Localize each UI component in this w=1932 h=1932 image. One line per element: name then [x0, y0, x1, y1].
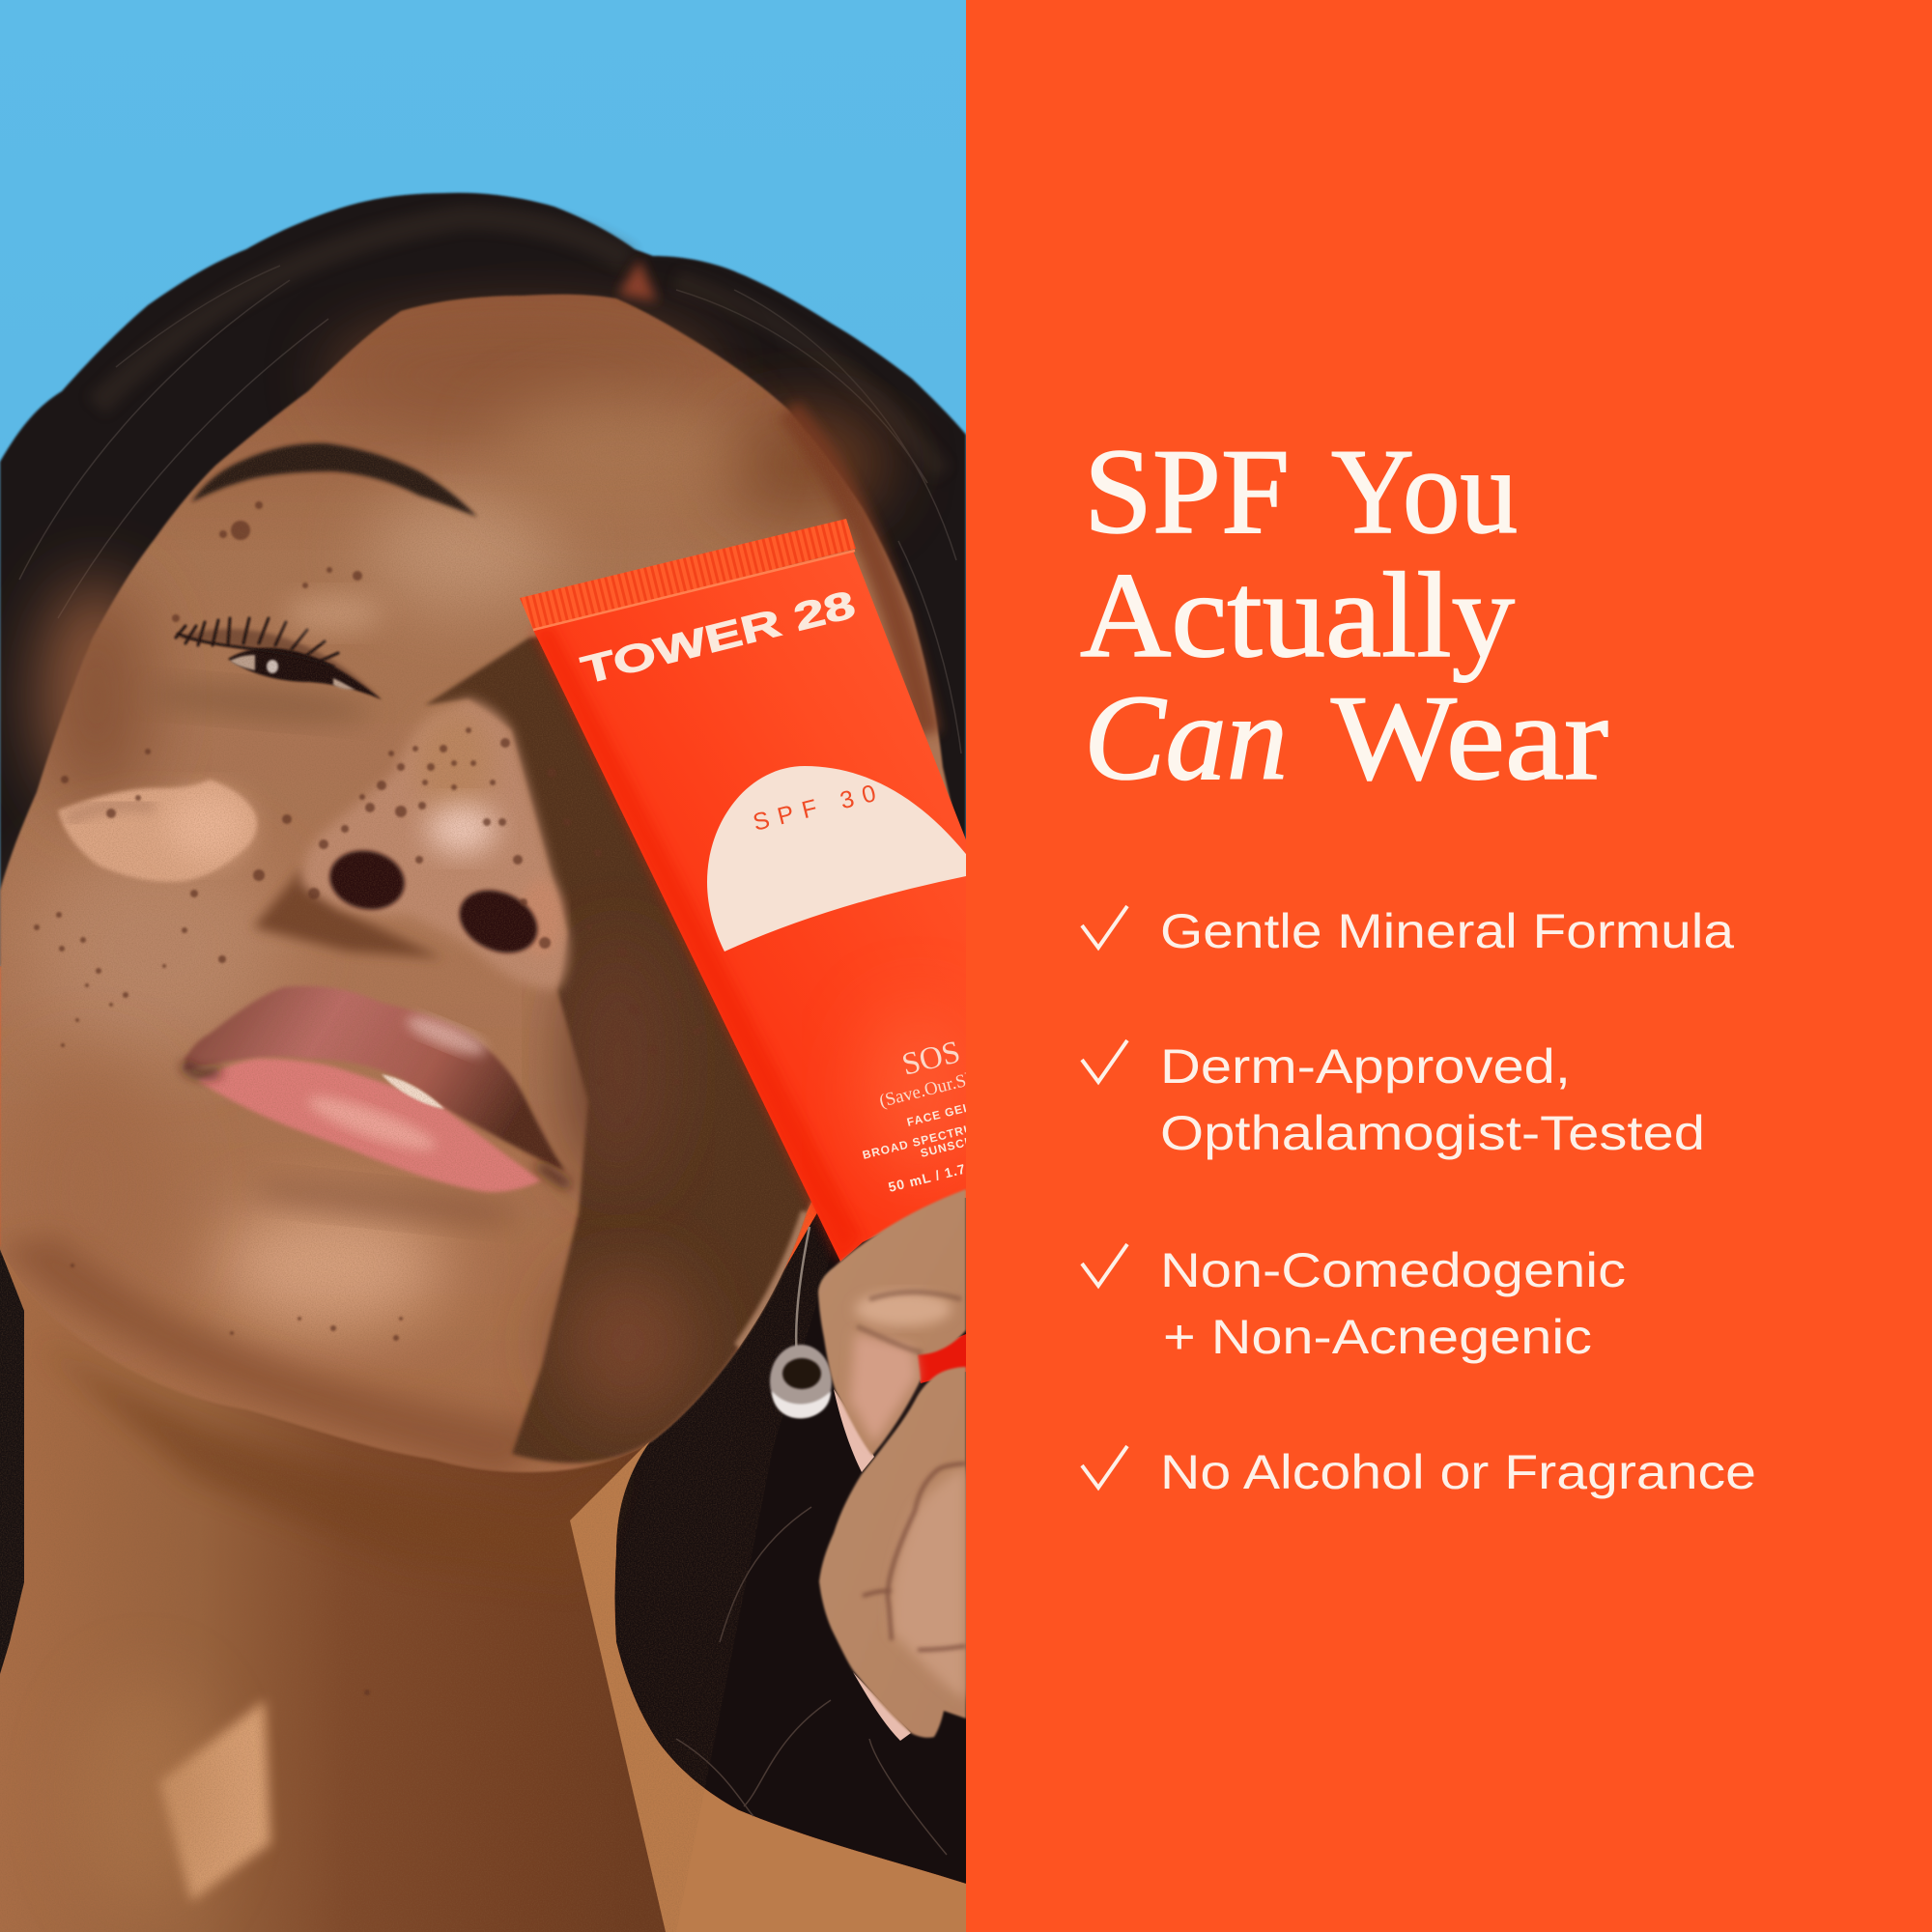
left edge shade — [533, 626, 863, 1262]
item: derm-approved — [1082, 1039, 1705, 1160]
lower fist — [819, 1367, 966, 1738]
mouth corners — [185, 1066, 566, 1184]
lower lip gloss — [303, 1088, 440, 1159]
eyelid highlight — [285, 594, 382, 633]
item: non-comedogenic — [1082, 1243, 1626, 1364]
earring — [770, 1227, 832, 1418]
upper lip — [185, 986, 565, 1171]
loose hair strands over shoulder — [676, 1507, 947, 1855]
item: gentle mineral formula: Gentle Mineral Formula — [1160, 904, 1734, 958]
temple highlight — [367, 493, 560, 609]
upper finger and palm — [818, 1189, 966, 1456]
hand holding tube — [818, 1189, 966, 1741]
lit shoulder — [570, 1437, 966, 1932]
palm pink area — [850, 1333, 918, 1444]
heading: Wear — [1331, 671, 1608, 806]
product name: SOS — [898, 1035, 964, 1083]
crimp line — [533, 551, 855, 630]
chin highlight — [213, 1203, 444, 1328]
sky background — [0, 0, 966, 966]
warm glow on face of tube — [860, 1005, 976, 1179]
brand wordmark: TOWER 28 — [578, 583, 860, 693]
nose tip highlight — [427, 804, 497, 854]
skin grain texture — [0, 290, 966, 1932]
eyebrow — [191, 443, 477, 517]
heading: Can — [1084, 671, 1288, 806]
hair: top and sides — [0, 193, 966, 966]
right nostril — [449, 879, 548, 964]
face — [0, 259, 966, 1478]
item: derm-approved: Opthalamogist-Tested — [1160, 1106, 1705, 1160]
nose skin — [301, 699, 568, 989]
finger lit plane — [891, 1468, 966, 1700]
product subtitle: (Save.Our.Skin) — [877, 1064, 997, 1112]
orange text panel — [966, 0, 1932, 1932]
jaw rim light — [739, 1212, 807, 1348]
hair strand at left edge — [0, 1249, 24, 1674]
product descriptor lines — [861, 1100, 1002, 1195]
item: derm-approved: Derm-Approved, — [1160, 1039, 1571, 1094]
product descriptor lines: 50 mL / 1.7 oz — [887, 1155, 988, 1195]
product descriptor lines: FACE GEL — [905, 1100, 973, 1129]
neck and shoulder — [0, 1246, 966, 1932]
SPF sun label — [707, 766, 976, 952]
heading: You — [1331, 425, 1518, 559]
nose cast shadow — [253, 869, 443, 958]
fleshy fingertip highlight — [855, 1292, 952, 1326]
heading: SPF — [1084, 425, 1290, 559]
index fingernail — [834, 1389, 874, 1472]
sunscreen swatch on cheek — [58, 780, 257, 882]
product tube — [520, 519, 1002, 1262]
teeth — [382, 1074, 444, 1109]
cheek glow — [29, 840, 280, 1053]
tube end between fingers — [913, 1334, 966, 1383]
tube body — [533, 551, 976, 1262]
SPF 30 text: SPF 30 — [751, 780, 879, 837]
finger crease — [857, 1293, 961, 1352]
heading: Actually — [1080, 549, 1515, 683]
freckles — [34, 501, 705, 1695]
thumb nail — [853, 1672, 911, 1741]
under-chin falloff — [0, 1236, 560, 1478]
item: non-comedogenic: Non-Comedogenic — [1160, 1243, 1626, 1297]
lips — [185, 986, 566, 1192]
item: no alcohol or fragrance: No Alcohol or Fragrance — [1160, 1445, 1756, 1499]
knuckle creases — [863, 1463, 966, 1650]
eyelid — [176, 629, 382, 699]
crimp seal — [520, 519, 856, 630]
eye — [149, 594, 382, 730]
left nostril — [325, 844, 410, 916]
eye socket shadow — [149, 676, 373, 730]
nose bridge lit plane — [415, 710, 493, 816]
left face shading — [39, 580, 155, 811]
shadow below jaw — [74, 1360, 438, 1555]
face skin base — [0, 295, 966, 1472]
nose — [253, 699, 568, 989]
lower lip — [197, 1059, 541, 1192]
upper lip gloss — [403, 1009, 490, 1063]
hairline warmth — [618, 259, 657, 301]
benefits list — [1082, 904, 1756, 1499]
lashes — [176, 618, 338, 667]
product descriptor lines: SUNSCREEN — [919, 1127, 1002, 1160]
eye opening — [228, 648, 382, 699]
light patch on collarbone — [159, 1700, 270, 1901]
iris glint — [267, 660, 278, 673]
forehead shading — [328, 319, 715, 435]
heading — [1080, 425, 1608, 806]
photo: woman holding sunscreen tube — [0, 0, 1002, 1932]
product descriptor lines: BROAD SPECTRUM — [861, 1119, 985, 1162]
hair: lower right behind neck — [614, 1198, 966, 1884]
item: non-comedogenic: + Non-Acnegenic — [1163, 1310, 1592, 1364]
sclera — [230, 655, 355, 690]
tube cast shadow on face — [425, 618, 966, 1463]
